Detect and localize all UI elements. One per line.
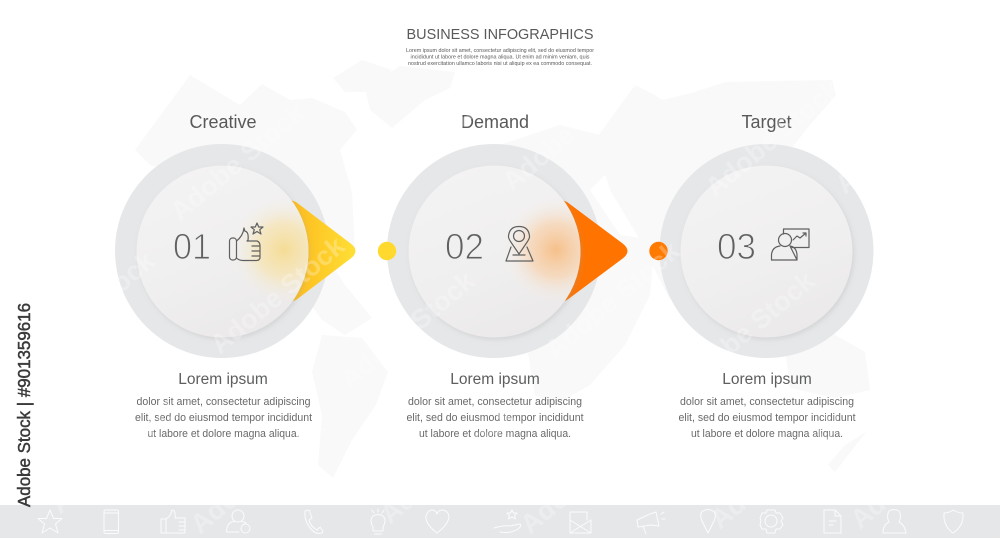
stock watermarks: Adobe Stock <box>185 410 331 538</box>
number 03: 03 <box>717 226 756 267</box>
icon: star <box>38 510 62 533</box>
Australia <box>785 332 870 398</box>
number 02: 02 <box>445 226 484 267</box>
description 3: ut labore et dolore magna aliqua. <box>691 428 843 440</box>
connector dot: yellow <box>378 242 396 260</box>
Arctic island <box>333 60 392 92</box>
icon: smartphone <box>104 510 118 534</box>
stock watermarks: Adobe Stock <box>515 410 661 538</box>
stock watermarks: Adobe Stock <box>35 57 181 187</box>
stock watermarks: Adobe Stock <box>15 245 161 375</box>
icon: document <box>824 510 841 533</box>
world map background <box>135 60 870 478</box>
description 2: elit, sed do eiusmod tempor incididunt <box>406 412 584 424</box>
icon: heart <box>426 510 449 533</box>
arrow: orange <box>557 198 628 304</box>
heading: Demand: Demand <box>461 112 529 132</box>
inner disc 3 <box>680 166 852 338</box>
stock watermarks: Adobe Stock <box>205 230 351 360</box>
icon: gear <box>760 510 783 533</box>
outer ring 3 <box>660 144 874 358</box>
stock watermarks: Adobe Stock <box>845 405 991 535</box>
icon: telephone <box>305 510 323 534</box>
arrow: yellow <box>285 198 356 304</box>
panel: Demand <box>387 112 628 440</box>
New Zealand <box>828 432 866 472</box>
description 1 <box>135 396 312 440</box>
icon: user with check <box>226 510 250 533</box>
panel: Target <box>660 112 874 440</box>
stock watermarks: Adobe Stock <box>540 235 686 365</box>
inner disc 2 <box>408 166 580 338</box>
description 3 <box>678 396 856 440</box>
stock watermarks: Adobe Stock <box>165 97 311 227</box>
icon: thumbs up with star <box>230 223 263 261</box>
stock watermarks: Adobe Stock <box>45 390 191 520</box>
icon: megaphone <box>637 512 665 534</box>
glass glow 2 <box>513 206 580 295</box>
stock watermarks: Adobe Stock <box>335 265 481 395</box>
intro text: nostrud exercitation ullamco laboris nisi ut aliquip ex ea commodo consequat. <box>408 61 592 67</box>
title: BUSINESS INFOGRAPHICS <box>406 26 594 43</box>
stock watermarks: Adobe Stock <box>370 67 516 197</box>
subheading 1: Lorem ipsum <box>178 371 268 388</box>
stock watermarks: Adobe Stock <box>700 73 846 203</box>
subheading 3: Lorem ipsum <box>722 371 812 388</box>
subheading 2: Lorem ipsum <box>450 371 540 388</box>
vertical stock id: Adobe Stock | #901359616 <box>14 303 34 507</box>
intro text: Lorem ipsum dolor sit amet, consectetur adipiscing elit, sed do eiusmod tempor <box>406 48 594 54</box>
description 2 <box>406 396 584 440</box>
outer ring 2 <box>387 144 601 358</box>
description 3: dolor sit amet, consectetur adipiscing <box>680 396 854 408</box>
inner disc 1 <box>136 166 308 338</box>
panel: Creative <box>115 112 356 440</box>
stock watermarks: Adobe Stock <box>705 405 851 535</box>
stock watermarks: Adobe Stock <box>830 70 976 200</box>
connector dot: orange <box>649 242 668 260</box>
Asia <box>595 80 836 300</box>
description 1: elit, sed do eiusmod tempor incididunt <box>135 412 312 424</box>
Madagascar <box>573 360 590 388</box>
icon: shield <box>944 510 963 533</box>
number 01: 01 <box>173 226 211 267</box>
Europe and Africa <box>450 125 655 405</box>
icon: person <box>883 510 906 533</box>
intro text: incididunt ut labore et dolore magna aliqua. Ut enim ad minim veniam, quis <box>410 54 590 60</box>
South America <box>312 335 388 478</box>
outer ring 1 <box>115 144 329 358</box>
icon: light bulb <box>371 509 385 534</box>
icon: presenter with chart <box>772 229 809 260</box>
description 1: dolor sit amet, consectetur adipiscing <box>136 396 310 408</box>
description 2: ut labore et dolore magna aliqua. <box>419 428 571 440</box>
description 3: elit, sed do eiusmod tempor incididunt <box>678 412 856 424</box>
glass glow 1 <box>242 206 308 292</box>
stock watermarks: Adobe Stock <box>497 67 643 197</box>
heading: Creative: Creative <box>189 112 257 132</box>
icon: hand with star <box>494 510 521 533</box>
icon: map pin <box>506 226 533 261</box>
stock watermarks: Adobe Stock <box>375 400 521 530</box>
Greenland <box>365 66 455 128</box>
icon: thumbs up <box>161 510 185 533</box>
bottom icon strip <box>0 505 1000 538</box>
description 1: ut labore et dolore magna aliqua. <box>148 428 300 440</box>
icon: open envelope <box>570 512 591 533</box>
intro text <box>406 48 594 67</box>
North America <box>135 75 372 335</box>
bottom row of icons <box>38 509 963 534</box>
icon: location pin <box>701 510 715 533</box>
stock watermarks: Adobe Stock <box>675 265 821 395</box>
heading: Target: Target <box>741 112 792 132</box>
description 2: dolor sit amet, consectetur adipiscing <box>408 396 582 408</box>
